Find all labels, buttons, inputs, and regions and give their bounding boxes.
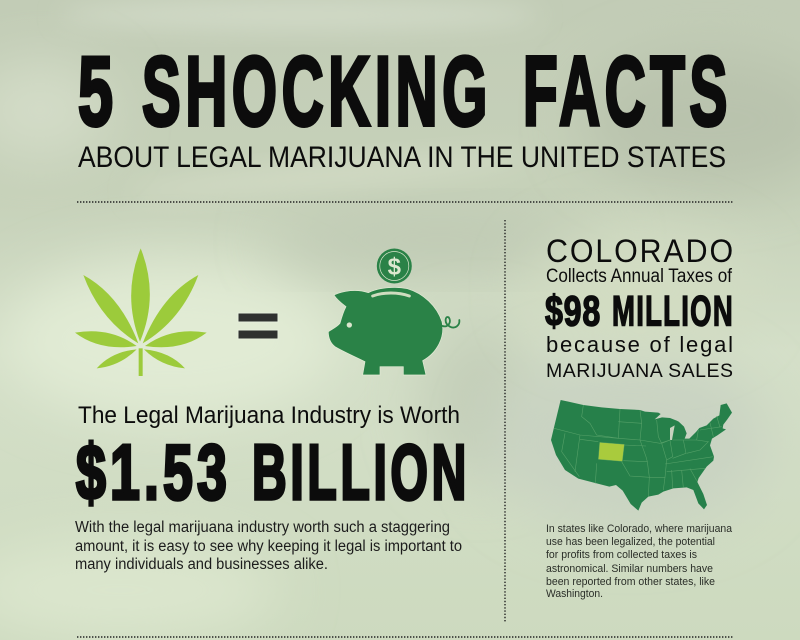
- paragraph: industry description: amount, it is easy to see why keeping it legal is important to: [75, 538, 462, 555]
- bottom dotted divider: [77, 636, 733, 638]
- big number: $98 million: [545, 288, 734, 336]
- text: marijuana sales: MARIJUANA SALES: [546, 360, 733, 382]
- big number: $1.53 billion: BILLION: [252, 428, 470, 516]
- paragraph: industry description: [75, 519, 462, 573]
- heading: industry worth: The Legal Marijuana Industry is Worth: [78, 402, 460, 429]
- icon: coin with dollar sign: $: [388, 254, 402, 280]
- map: United States with Colorado highlighted: [551, 400, 732, 511]
- paragraph: Colorado tax description: In states like Colorado, where marijuana: [546, 523, 733, 535]
- big number: $1.53 billion: [76, 428, 470, 516]
- top dotted divider: [77, 201, 733, 203]
- big number: $98 million: $98: [545, 288, 601, 336]
- icon: equals sign: [238, 313, 278, 339]
- paragraph: industry description: With the legal marijuana industry worth such a staggering: [75, 519, 450, 536]
- paragraph: Colorado tax description: [546, 523, 733, 600]
- title: 5: [78, 36, 113, 146]
- vertical dotted divider: [504, 220, 506, 622]
- icon: cannabis leaf: [75, 248, 207, 376]
- paragraph: Colorado tax description: astronomical. Similar numbers have: [546, 563, 713, 575]
- big number: $98 million: MILLION: [612, 288, 734, 336]
- icon: coin with dollar sign: [377, 248, 412, 284]
- text: collects annual taxes of: Collects Annual Taxes of: [546, 266, 733, 287]
- subtitle: ABOUT LEGAL MARIJUANA IN THE UNITED STATES: [78, 141, 726, 174]
- big number: $1.53 billion: $1.53: [76, 428, 231, 516]
- heading: Colorado: COLORADO: [546, 233, 735, 269]
- paragraph: industry description: many individuals and businesses alike.: [75, 556, 328, 573]
- text: because of legal: because of legal: [546, 332, 733, 357]
- paragraph: Colorado tax description: Washington.: [546, 588, 603, 600]
- paragraph: Colorado tax description: for profits from collected taxes is: [546, 549, 697, 561]
- paragraph: Colorado tax description: been reported from other states, like: [546, 576, 715, 588]
- title: SHOCKING: [142, 36, 492, 146]
- icon: piggy bank: [328, 287, 459, 375]
- paragraph: Colorado tax description: use has been legalized, the potential: [546, 536, 715, 548]
